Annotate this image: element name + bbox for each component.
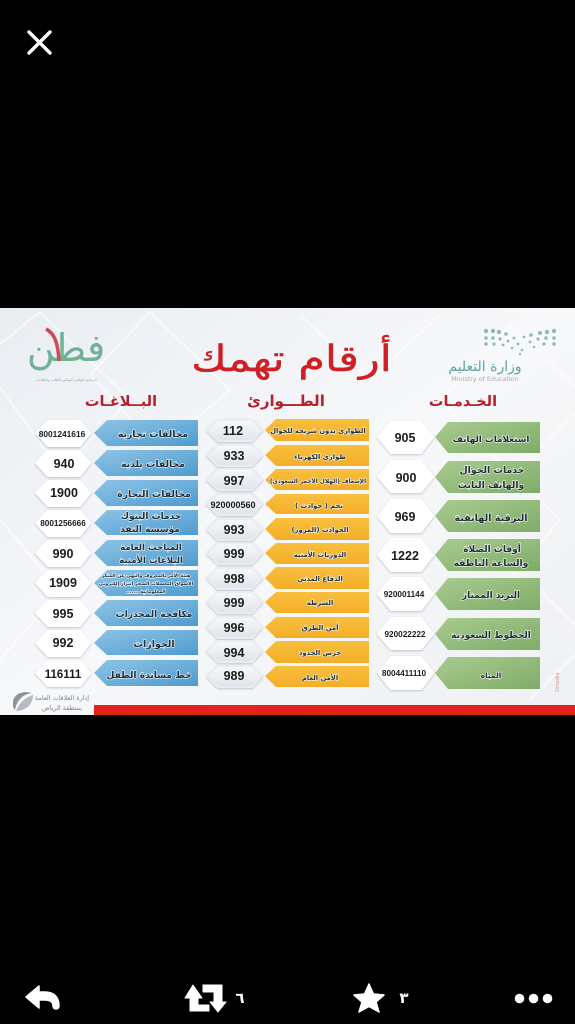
row: water: المياه [481, 671, 501, 680]
row: child helpline: 116111 [45, 669, 82, 681]
row: narcotics: 995 [53, 607, 73, 621]
row: road security: أمن الطرق [302, 623, 338, 632]
row: municipal violations: 940 [54, 457, 74, 471]
icon: star [354, 984, 384, 1012]
row: banking services [36, 510, 198, 536]
row: municipal violations: مخالفات بلدية [121, 459, 185, 470]
retweet count: ٦ [235, 989, 245, 1007]
row: passports [36, 630, 198, 656]
row: electricity: طوارئ الكهرباء [294, 453, 346, 461]
row: public security: هيئة الأمر بالمعروف والنهي عن المنكر [101, 572, 190, 579]
row: express mail [378, 578, 540, 610]
row: public security [207, 666, 369, 687]
row: mobile services [378, 461, 540, 493]
heading: services: الخـدمـات [429, 394, 497, 410]
row: Najm [207, 494, 369, 515]
row: directory: استعلامات الهاتف [453, 435, 529, 445]
row: border guard: حرس الحدود [299, 649, 341, 657]
heading: reports: البــلاغـات [85, 394, 157, 410]
row: prayer times: أوقات الصلاة [463, 543, 521, 555]
icon: reply [26, 986, 59, 1009]
row: commercial violations [36, 420, 198, 446]
row: public security: الأسواق المعسلات السحر ابتزاز إلكتروني [99, 580, 194, 587]
row: telegraph: 969 [395, 510, 415, 524]
row: express mail: 920001144 [384, 590, 425, 599]
row: express mail: البريد الممتاز [461, 591, 520, 601]
row: investigations [36, 540, 198, 566]
logo: public relations: إدارة العلاقات العامة [35, 694, 89, 702]
row: commercial violations: مخالفات تجارية [118, 429, 188, 440]
heading: emergency: الطـــوارئ [247, 392, 325, 410]
row: commercial violations: 8001241616 [39, 429, 86, 439]
row: directory: 905 [395, 431, 415, 445]
row: narcotics: مكافحة المخدرات [116, 610, 192, 620]
row: banking services: خدمات البنوك [121, 512, 181, 522]
row: Saudi airlines [378, 618, 540, 650]
row: narcotics [36, 600, 198, 626]
row: commerce violations [36, 480, 198, 506]
row: directory [378, 422, 540, 453]
row: mobile services: 900 [396, 471, 416, 485]
row: commerce violations: مخالفات التجارة [117, 489, 191, 500]
row: child helpline: خط مساندة الطفل [106, 671, 192, 681]
row: emergency without SIM: 112 [223, 424, 243, 438]
logo: Ministry of Education: وزارة التعليم [448, 359, 522, 375]
row: Najm: 920000560 [210, 500, 256, 510]
row: passports: 992 [53, 636, 73, 650]
column: reports [36, 420, 198, 686]
row: Red Crescent: 997 [224, 474, 244, 488]
column: services [378, 422, 540, 689]
row: Red Crescent: الإسعاف (الهلال الأحمر السعودي) [270, 477, 366, 485]
row: emergency without SIM: الطوارئ بدون شريحة للجوال [270, 427, 366, 435]
row: banking services: 8001256666 [40, 519, 86, 528]
logo: public relations: بمنطقة الرياض [42, 704, 82, 712]
row: banking services: مؤسسة النقد [120, 525, 180, 535]
row: public security: 989 [224, 669, 244, 683]
row: Red Crescent [207, 469, 369, 490]
row: border guard [207, 641, 369, 663]
row: civil defense: 998 [224, 572, 244, 586]
row: security patrols [207, 543, 369, 564]
row: Saudi airlines: 920022222 [385, 630, 426, 639]
row: security patrols: 999 [224, 547, 244, 561]
row: prayer times: 1222 [391, 549, 419, 563]
row: road security: 996 [224, 621, 244, 635]
row: police: 999 [224, 596, 244, 610]
row: child helpline [36, 660, 198, 686]
row: water: 8004411110 [382, 669, 427, 678]
logo: Fatin: البرنامج الوقائي الوطني للطلاب والطالبات [35, 378, 97, 382]
row: traffic: 993 [224, 523, 244, 537]
row: telegraph [378, 500, 540, 532]
row: border guard: 994 [224, 646, 244, 660]
row: prayer times [378, 539, 540, 571]
row: public security: 1909 [49, 576, 77, 590]
icon: close [29, 32, 50, 53]
row: Najm: نجم ( حوادث ) [295, 502, 343, 510]
row: traffic: الحوادث (المرور) [291, 526, 349, 534]
red footer bar [94, 705, 575, 715]
row: investigations: البلاغات الأمنية [119, 555, 183, 566]
row: prayer times: والساعة الناطقة [454, 558, 529, 569]
row: water [378, 657, 540, 689]
row: public security: الأمن العام [302, 673, 338, 682]
row: investigations: 990 [53, 547, 73, 561]
icon: more [515, 994, 552, 1003]
row: civil defense: الدفاع المدني [297, 575, 343, 583]
small signature mark: Omedia [555, 672, 561, 692]
row: commerce violations: 1900 [50, 486, 78, 500]
row: municipal violations [36, 450, 198, 476]
row: mobile services: والهاتف الثابت [458, 480, 524, 491]
row: civil defense [207, 567, 369, 589]
row: investigations: المباحث العامة [120, 543, 182, 553]
row: electricity [207, 445, 369, 466]
row: traffic [207, 518, 369, 540]
row: mobile services: خدمات الجوال [460, 465, 524, 476]
logo: public relations [13, 692, 89, 712]
favorite count: ٣ [399, 989, 409, 1007]
logo: Ministry of Education: Ministry of Education [451, 375, 519, 383]
row: Saudi airlines: الخطوط السعودية [451, 631, 531, 641]
row: electricity: 933 [224, 449, 244, 463]
logo: Fatin: فطن [27, 326, 105, 371]
logo: Ministry of Education [448, 329, 556, 383]
row: police [207, 592, 369, 613]
row: passports: الجوازات [133, 639, 175, 650]
infographic panel [0, 308, 575, 715]
row: telegraph: البرقية الهاتفية [454, 513, 528, 524]
column: emergency [207, 419, 369, 687]
row: public security: المعلوماتية ....... [126, 589, 166, 595]
row: emergency without SIM [207, 419, 369, 441]
row: police: الشرطة [307, 599, 333, 607]
icon: retweet [185, 985, 226, 1012]
row: public security [36, 570, 198, 596]
title: أرقام تهمك [191, 335, 392, 380]
row: security patrols: الدوريات الأمنية [294, 550, 346, 559]
row: road security [207, 617, 369, 638]
